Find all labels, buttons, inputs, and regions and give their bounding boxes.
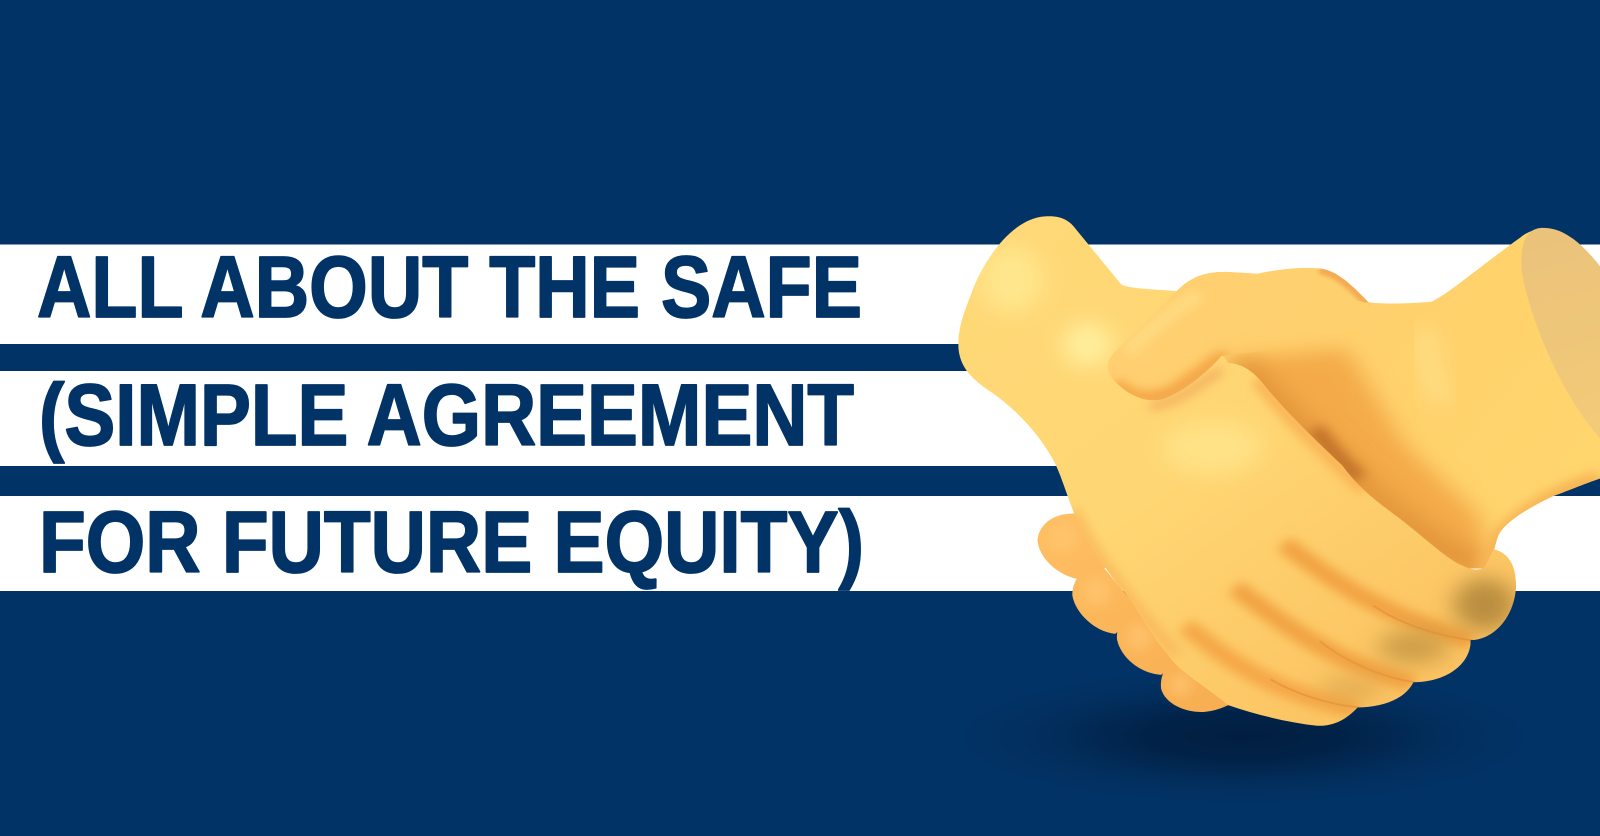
thumb shadow [1150,369,1221,407]
icon: handshake [958,216,1600,786]
title line 3: FOR FUTURE EQUITY) [39,494,864,591]
back fingertips [1038,514,1230,712]
title line 2: (SIMPLE AGREEMENT [39,367,854,464]
title line 1: ALL ABOUT THE SAFE [37,239,862,336]
wrist cut [1521,228,1600,438]
knuckle shading [1454,578,1516,632]
hand shadow [958,670,1529,804]
white stripes [0,244,1600,591]
banner [0,216,1600,786]
palm shading [1221,348,1489,574]
title [37,239,864,591]
finger creases [1284,544,1471,641]
left hand [958,216,1516,726]
crease shadow [1239,364,1480,570]
right hand [1177,228,1600,568]
highlights [1063,322,1112,368]
top edge shade [1257,379,1364,490]
right thumb [1108,272,1368,400]
finger edges [1271,606,1472,707]
